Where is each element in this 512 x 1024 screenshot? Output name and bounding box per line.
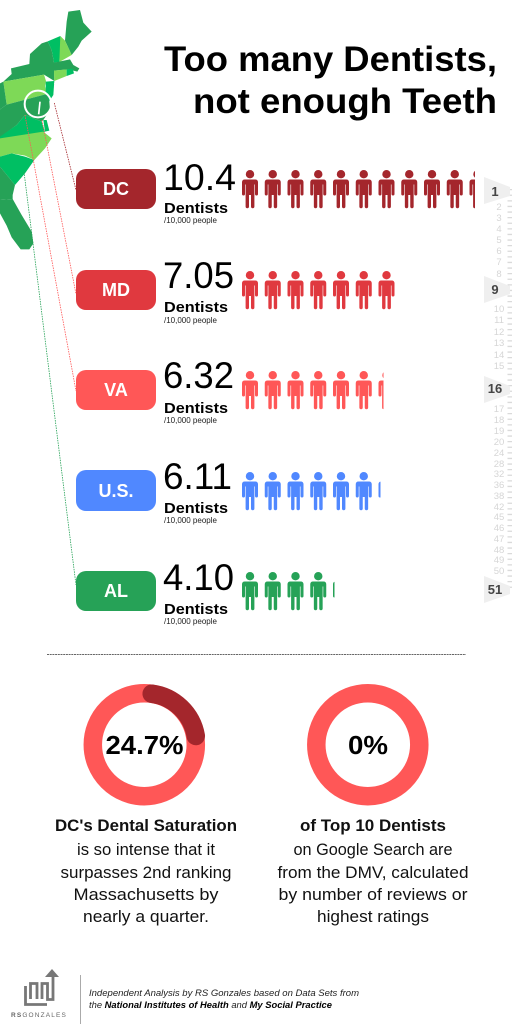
- value: AL: /10,000 people: [164, 617, 217, 626]
- rank minor numbers: 14: [494, 350, 504, 361]
- value: MD: 7.05: [163, 255, 234, 296]
- badge: VA: [76, 370, 156, 410]
- value: DC: Dentists: [164, 200, 228, 217]
- rank highlighted numbers: [488, 184, 502, 597]
- badge: MD: [76, 270, 156, 310]
- pictogram: MD: [242, 271, 394, 309]
- logo: RS Gonzales: RSGONZALES: [11, 1012, 67, 1019]
- badge: U.S.: [76, 470, 156, 511]
- footer credit: [89, 988, 359, 1010]
- rank minor numbers: 10: [494, 304, 504, 315]
- text block: top 10 dentists: by number of reviews or: [278, 886, 468, 904]
- rank highlighted numbers: 51: [488, 582, 502, 597]
- value: VA: /10,000 people: [164, 416, 217, 425]
- pictogram: VA: [242, 371, 394, 409]
- value: DC: /10,000 people: [164, 216, 217, 225]
- rank minor numbers: 11: [494, 315, 504, 326]
- text block: top 10 dentists: [278, 817, 468, 926]
- rank minor numbers: 36: [494, 480, 504, 491]
- text block: DC saturation: Massachusetts by: [74, 886, 219, 904]
- text block: DC saturation: surpasses 2nd ranking: [60, 864, 232, 882]
- rank minor numbers: 13: [494, 338, 504, 349]
- text block: DC saturation: [55, 817, 237, 926]
- rank minor numbers: 7: [496, 257, 502, 268]
- value: DC: 10.4: [163, 157, 236, 198]
- title: Too many Dentists,: [164, 40, 497, 79]
- rank minor numbers: 4: [496, 224, 502, 235]
- rank minor numbers: 5: [496, 235, 502, 246]
- value: VA: Dentists: [164, 400, 228, 417]
- donut: 24.7%: 24.7%: [106, 730, 184, 760]
- rank minor numbers: 32: [494, 469, 504, 480]
- rank highlighted numbers: 1: [491, 184, 499, 199]
- value: U.S.: /10,000 people: [164, 516, 217, 525]
- rank minor numbers: 50: [494, 566, 504, 577]
- text block: top 10 dentists: highest ratings: [317, 908, 429, 926]
- rank minor numbers: 46: [494, 523, 504, 534]
- badge: AL: AL: [104, 581, 128, 601]
- row: VA: [76, 362, 384, 424]
- rank minor numbers: 28: [494, 459, 504, 470]
- map: eastern US states: [0, 10, 92, 249]
- rank minor numbers: 48: [494, 545, 504, 556]
- rank minor numbers: 12: [494, 327, 504, 338]
- value: AL: 4.10: [163, 557, 234, 598]
- row: U.S.: [76, 463, 380, 524]
- text block: top 10 dentists: of Top 10 Dentists: [300, 817, 446, 835]
- row: MD: [76, 255, 394, 325]
- footer credit: the National Institutes of Health and My Social Practice: [89, 1000, 332, 1010]
- text block: DC saturation: nearly a quarter.: [83, 908, 209, 926]
- pictogram: U.S.: [242, 472, 394, 510]
- badge: MD: MD: [102, 280, 130, 300]
- text block: DC saturation: is so intense that it: [77, 841, 215, 859]
- value: MD: Dentists: [164, 299, 228, 316]
- rank ruler: [484, 177, 510, 603]
- badge: AL: [76, 571, 156, 611]
- badge: VA: VA: [104, 380, 128, 400]
- rank minor numbers: 17: [494, 404, 504, 415]
- rank minor numbers: 18: [494, 415, 504, 426]
- rank minor numbers: 8: [496, 269, 502, 280]
- rank minor numbers: 45: [494, 512, 504, 523]
- value: U.S.: 6.11: [163, 456, 232, 497]
- rank minor numbers: 49: [494, 555, 504, 566]
- title: not enough Teeth: [193, 82, 497, 121]
- value: VA: 6.32: [163, 355, 234, 396]
- value: MD: [163, 255, 234, 325]
- rank minor numbers: 15: [494, 361, 504, 372]
- rank minor numbers: 19: [494, 426, 504, 437]
- pictogram: DC: [242, 170, 486, 208]
- rank minor numbers: [494, 202, 504, 577]
- rank minor numbers: 38: [494, 491, 504, 502]
- value: DC: [163, 157, 236, 225]
- donut: 0%: [316, 693, 419, 796]
- value: AL: [163, 557, 234, 626]
- rank tabs: [484, 177, 510, 603]
- badge: U.S.: U.S.: [98, 481, 134, 501]
- pictogram: AL: [242, 572, 334, 610]
- row: AL: [76, 564, 334, 626]
- value: U.S.: Dentists: [164, 500, 228, 517]
- rank minor numbers: 3: [496, 213, 502, 224]
- row: DC: [76, 164, 475, 224]
- value: U.S.: [163, 456, 232, 525]
- value: VA: [163, 355, 234, 425]
- rank minor numbers: 24: [494, 448, 504, 459]
- donut: 24.7%: [93, 693, 196, 796]
- logo: RS Gonzales: [11, 969, 67, 1019]
- text block: DC saturation: DC's Dental Saturation: [55, 817, 237, 835]
- title: [164, 40, 497, 121]
- rank minor numbers: 47: [494, 534, 504, 545]
- rank minor numbers: 2: [496, 202, 502, 213]
- footer credit: Independent Analysis by RS Gonzales based on Data Sets from: [89, 988, 359, 998]
- text block: top 10 dentists: on Google Search are: [294, 841, 452, 859]
- value: AL: Dentists: [164, 601, 228, 618]
- rank minor numbers: 20: [494, 437, 504, 448]
- value: MD: /10,000 people: [164, 316, 217, 325]
- badge: DC: DC: [103, 179, 129, 199]
- badge: DC: [76, 169, 156, 209]
- rank minor numbers: 6: [496, 246, 502, 257]
- donut: 0%: 0%: [348, 730, 388, 760]
- connector lines from map to badges: [24, 103, 76, 585]
- rank highlighted numbers: 9: [491, 282, 499, 297]
- rank highlighted numbers: 16: [488, 381, 502, 396]
- text block: top 10 dentists: from the DMV, calculated: [278, 864, 468, 882]
- rank minor numbers: 42: [494, 502, 504, 513]
